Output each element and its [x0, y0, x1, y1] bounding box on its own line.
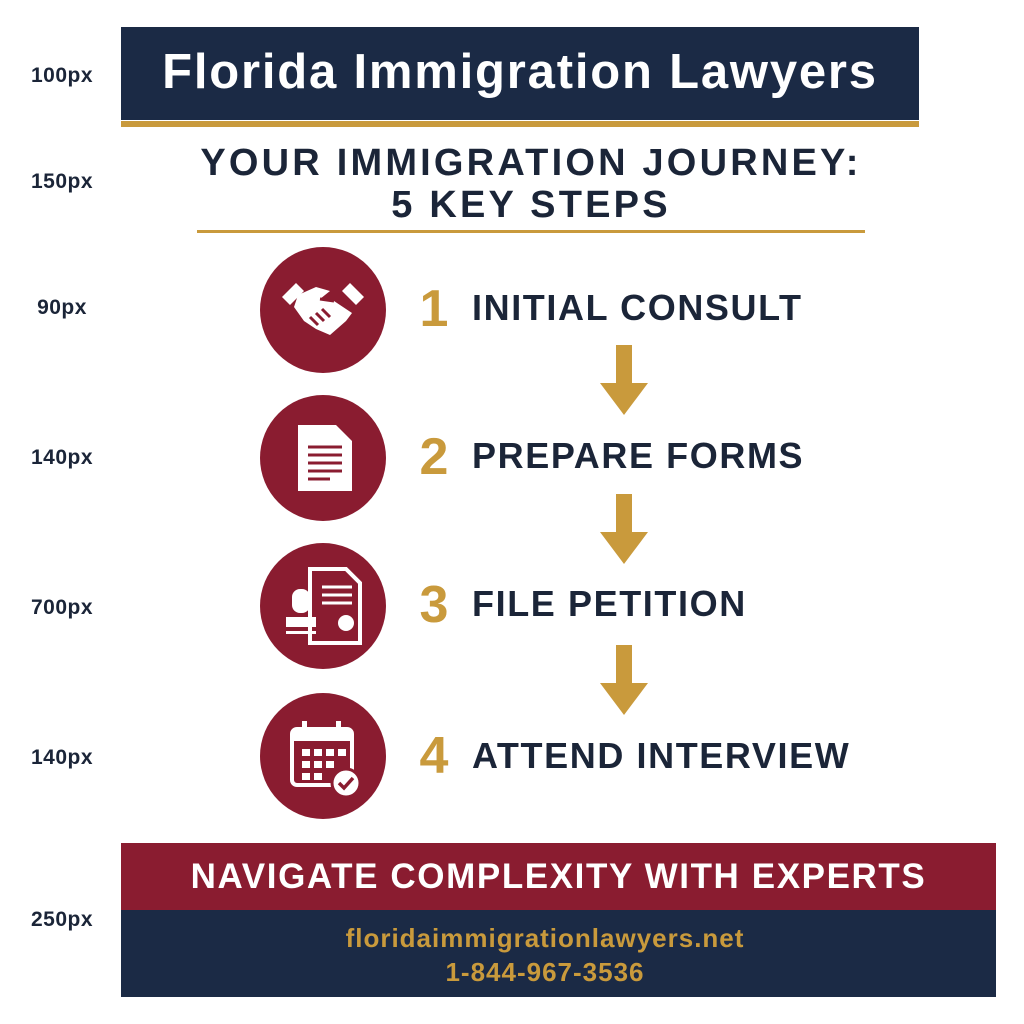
subtitle: 5 KEY STEPS [391, 184, 671, 226]
title: Florida Immigration Lawyers [162, 45, 878, 99]
subtitle [200, 142, 862, 226]
step 4 number: 4 [420, 727, 448, 785]
arrow 3 [600, 645, 648, 715]
step 3 text: FILE PETITION [472, 583, 747, 624]
header banner [121, 27, 919, 127]
icon: handshake [260, 247, 386, 373]
side label 700px: 700px [31, 596, 93, 619]
footer banner [121, 843, 996, 997]
subtitle: YOUR IMMIGRATION JOURNEY: [200, 142, 862, 184]
icon: stamp and certificate [260, 543, 386, 669]
step 2 text: PREPARE FORMS [472, 435, 804, 476]
side label 100px: 100px [31, 64, 93, 87]
phone: 1-844-967-3536 [445, 957, 645, 987]
step 4 text: ATTEND INTERVIEW [472, 735, 850, 776]
side label 90px: 90px [37, 296, 87, 319]
step 3 number: 3 [420, 576, 448, 634]
side label 150px: 150px [31, 170, 93, 193]
footer headline: NAVIGATE COMPLEXITY WITH EXPERTS [191, 857, 926, 896]
arrow 1 [600, 345, 648, 415]
step 2 number: 2 [420, 428, 448, 486]
side label 250px: 250px [31, 908, 93, 931]
arrow 2 [600, 494, 648, 564]
side label 140px: 140px [31, 446, 93, 469]
step 1 text: INITIAL CONSULT [472, 287, 803, 328]
icon: document [260, 395, 386, 521]
side label 140px: 140px [31, 746, 93, 769]
gold divider [197, 230, 865, 233]
icon: calendar check [260, 693, 386, 819]
step 1 number: 1 [420, 280, 448, 338]
website: floridaimmigrationlawyers.net [346, 923, 744, 953]
